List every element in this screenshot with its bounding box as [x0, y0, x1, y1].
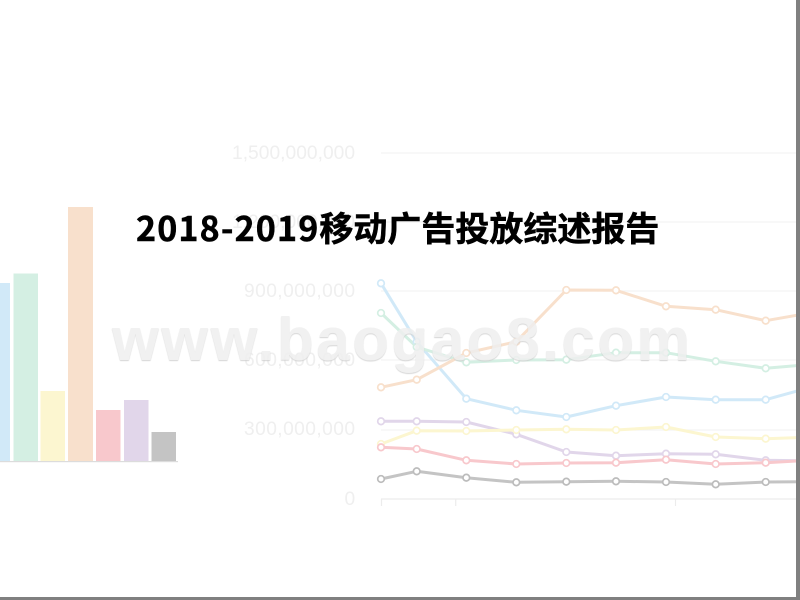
line chart y axis labels [232, 143, 355, 510]
title: 2018-2019移动广告投放综述报告 [136, 202, 659, 251]
line chart y axis labels: 300,000,000 [244, 419, 355, 440]
line chart [378, 153, 800, 506]
bar chart [0, 207, 178, 462]
line chart y axis labels: 0 [344, 489, 355, 510]
line chart y axis labels: 1,200,000,000 [232, 212, 355, 233]
watermark: www.baogao8.com [111, 306, 690, 373]
line chart y axis labels: 1,500,000,000 [232, 143, 355, 164]
line chart y axis labels: 600,000,000 [244, 350, 355, 371]
line chart y axis labels: 900,000,000 [244, 281, 355, 302]
